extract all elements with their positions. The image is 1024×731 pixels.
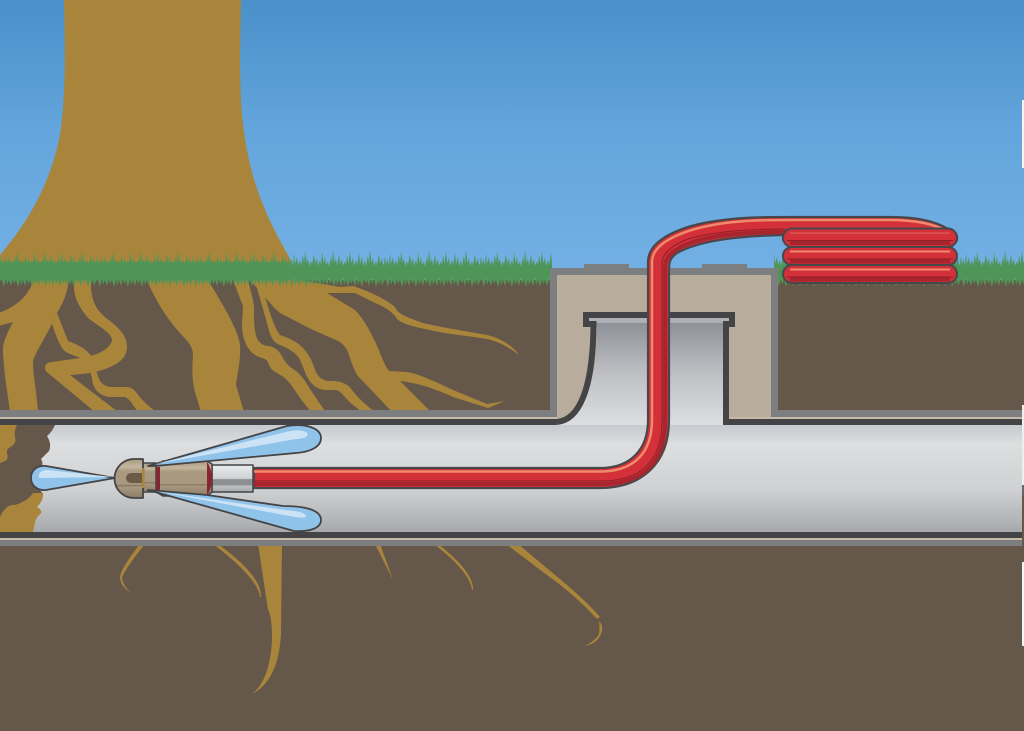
nozzle collar [143,463,156,492]
pipe upper wall left [0,410,557,425]
root blockage debris [0,425,55,532]
diagonal root tail [585,621,602,646]
debris upper gold chunk [0,425,17,463]
steel ferrule [212,465,253,492]
hose shadow band [254,232,785,484]
debris lower gold chunk [0,493,43,532]
pipe upper wall right [723,410,1024,425]
root tendril 1 [120,544,145,593]
root: s-curve root [45,280,127,412]
body red end cap [207,462,212,495]
root tendril 4 [434,544,473,590]
root: narrow root two [250,280,375,412]
red hose [254,217,957,488]
hose highlight [254,220,946,472]
root: central root [147,280,244,412]
root: narrow root one [233,280,326,412]
hose dark line [254,229,785,481]
pipe lower wall [0,532,1024,546]
water spray forward [31,466,115,490]
riser cap bumps [584,264,747,270]
water spray lower [148,490,321,531]
gold seam [142,468,144,488]
grass strip left [0,248,552,288]
jet nozzle [115,459,253,498]
upper soil left [0,280,552,412]
root: left trunk root [0,280,69,412]
nozzle body [156,461,212,496]
tree trunk [0,0,292,275]
root: thin crossing root [52,313,154,412]
root: large spreading root [252,280,519,412]
large diagonal root [506,544,600,619]
riser concrete fill [557,275,771,421]
upper soil right [776,280,1024,412]
right edge scan marks [1022,100,1024,646]
coil 3 [783,265,957,283]
large tap root [252,544,282,694]
dome slot [126,473,143,483]
inlet interior [557,318,729,425]
pipe interior [0,425,1024,532]
root tendril 3 [375,544,393,580]
coil 1 [783,228,957,247]
inlet top lip [588,318,730,323]
inlet outline [557,315,732,425]
coil 2 [783,247,957,265]
sky background [0,0,1024,290]
lower soil [0,544,1024,731]
roots below pipe [120,544,602,694]
tree roots above pipe [0,280,519,412]
riser gray shell [550,268,778,418]
hose coil stack [783,228,957,283]
nozzle dome head [115,459,143,498]
root tendril 2 [213,544,261,597]
grass strip right [774,248,1024,288]
concrete access riser [550,264,778,421]
hose body [254,217,957,488]
water spray upper [148,425,321,466]
body red band [156,467,160,490]
debris brown mass [0,425,55,517]
grass strip over trunk [0,262,290,280]
